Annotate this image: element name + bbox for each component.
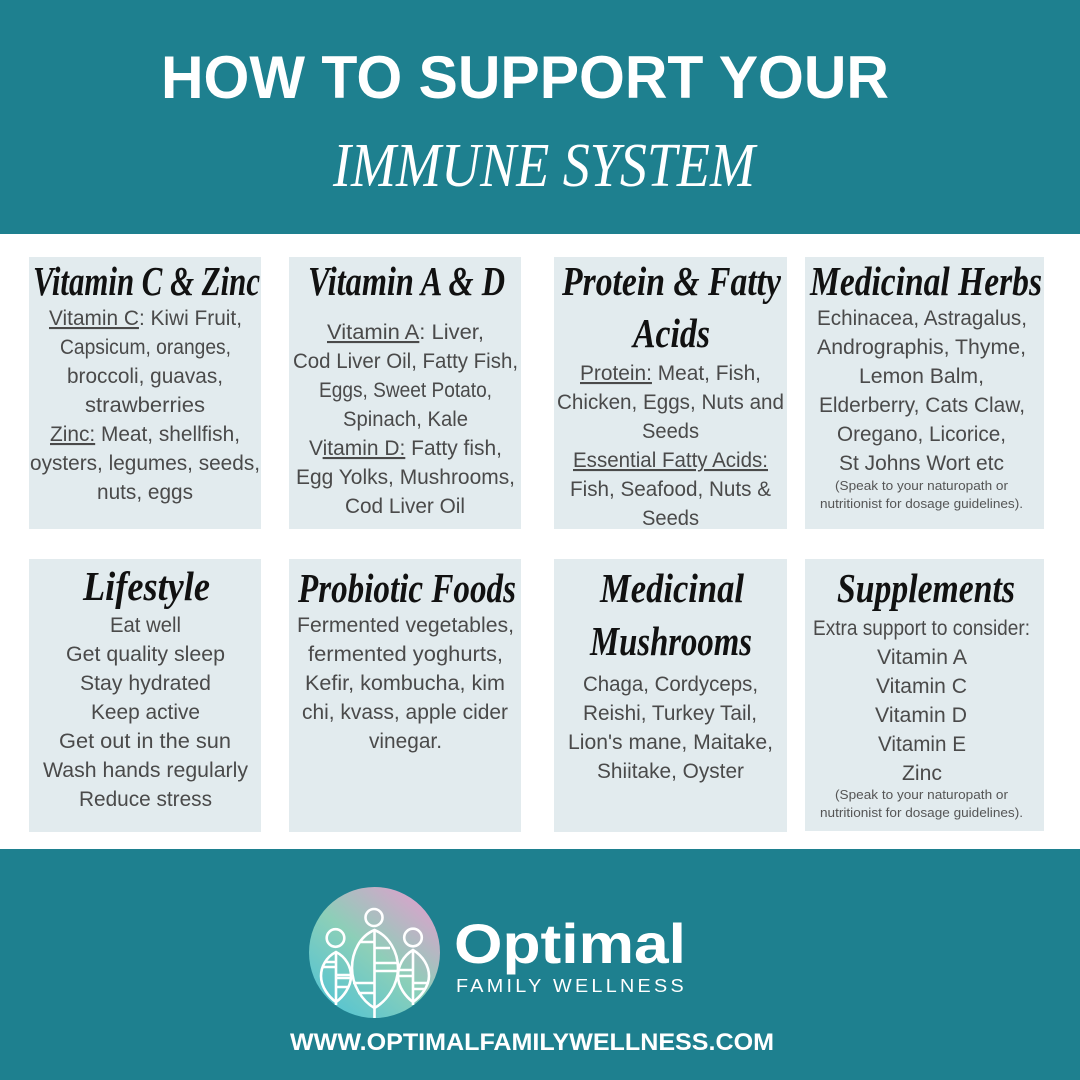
panel: medicinal mushrooms: [554, 559, 787, 832]
note: dosage guidance: (Speak to your naturopath or: [835, 787, 1009, 802]
list: vitamin c and zinc foods: Capsicum, oranges,: [60, 336, 231, 359]
list: probiotic foods: Kefir, kombucha, kim: [305, 672, 505, 695]
list: mushrooms: Shiitake, Oyster: [597, 760, 744, 783]
list: protein and fatty acid foods: Chicken, Eggs, Nuts and: [557, 391, 784, 414]
list: herbs: Echinacea, Astragalus,: [817, 307, 1027, 330]
list: vitamin a and d foods: Spinach, Kale: [343, 408, 468, 431]
list: lifestyle habits: Eat well: [110, 614, 181, 637]
website url: WWW.OPTIMALFAMILYWELLNESS.COM: [290, 1029, 774, 1056]
list: vitamin a and d foods: Cod Liver Oil, Fatty Fish,: [293, 350, 518, 373]
list: vitamin a and d foods: [293, 321, 518, 518]
heading: probiotic foods: Probiotic Foods: [297, 565, 516, 611]
list: herbs: Elderberry, Cats Claw,: [819, 394, 1025, 417]
list: mushrooms: Lion's mane, Maitake,: [568, 731, 773, 754]
list: lifestyle habits: Stay hydrated: [80, 672, 211, 695]
list: mushrooms: Chaga, Cordyceps,: [583, 673, 758, 696]
heading: protein and fatty acids: Protein & Fatty: [561, 258, 782, 304]
logo wordmark: Optimal: [454, 912, 686, 975]
panel: protein and fatty acids: [554, 257, 787, 530]
heading: supplements: Supplements: [837, 565, 1015, 611]
heading: vitamin c and zinc: Vitamin C & Zinc: [33, 258, 260, 304]
list: protein and fatty acid foods: Seeds: [642, 420, 699, 443]
note: dosage guidance: nutritionist for dosage guidelines).: [820, 496, 1023, 511]
subtitle: IMMUNE SYSTEM: [332, 132, 758, 200]
list: lifestyle habits: Reduce stress: [79, 788, 212, 811]
list: protein and fatty acid foods: [557, 362, 784, 530]
list: probiotic foods: [297, 614, 514, 753]
list: vitamin c and zinc foods: nuts, eggs: [97, 481, 193, 504]
list: lifestyle habits: Get out in the sun: [59, 730, 231, 753]
panel: vitamin c and zinc: [29, 257, 261, 529]
list: herbs: Oregano, Licorice,: [837, 423, 1006, 446]
list: lifestyle habits: Get quality sleep: [66, 643, 225, 666]
list: vitamin c and zinc foods: strawberries: [85, 394, 205, 417]
list: vitamin a and d foods: Vitamin D: Fatty fish,: [309, 437, 502, 460]
list: vitamin a and d foods: Egg Yolks, Mushrooms,: [296, 466, 515, 489]
list: herbs: Lemon Balm,: [859, 365, 984, 388]
list: vitamin a and d foods: Vitamin A: Liver,: [327, 321, 484, 344]
icon: logo family of leaves: [309, 887, 440, 1018]
list: vitamin a and d foods: Eggs, Sweet Potato,: [319, 379, 492, 402]
list: mushrooms: [568, 673, 773, 783]
heading: lifestyle: Lifestyle: [82, 563, 210, 609]
list: vitamin c and zinc foods: oysters, legumes, seeds,: [30, 452, 260, 475]
panel: vitamin a and d: [289, 257, 521, 529]
list: vitamin c and zinc foods: broccoli, guavas,: [67, 365, 223, 388]
header band: [0, 0, 1080, 234]
logo wordmark: [454, 912, 687, 996]
heading: medicinal mushrooms: Medicinal: [599, 565, 745, 611]
heading: medicinal mushrooms: Mushrooms: [589, 618, 752, 664]
list: vitamin a and d foods: Cod Liver Oil: [345, 495, 465, 518]
list: probiotic foods: chi, kvass, apple cider: [302, 701, 508, 724]
list: probiotic foods: vinegar.: [369, 730, 442, 753]
list: vitamin c and zinc foods: Zinc: Meat, shellfish,: [50, 423, 240, 446]
list: vitamin c and zinc foods: [30, 307, 260, 504]
list: probiotic foods: fermented yoghurts,: [308, 643, 503, 666]
note: dosage guidance: (Speak to your naturopath or: [835, 478, 1009, 493]
list: herbs: St Johns Wort etc: [839, 452, 1004, 475]
list: supplements: Zinc: [902, 762, 942, 785]
list: vitamin c and zinc foods: Vitamin C: Kiwi Fruit,: [49, 307, 242, 330]
heading: protein and fatty acids: [561, 258, 782, 356]
list: supplements: Vitamin C: [876, 675, 967, 698]
heading: protein and fatty acids: Acids: [631, 310, 710, 356]
list: supplements: Vitamin E: [878, 733, 966, 756]
list: lifestyle habits: [43, 614, 248, 811]
list: supplements: [813, 617, 1030, 785]
list: protein and fatty acid foods: Protein: Meat, Fish,: [580, 362, 761, 385]
list: lifestyle habits: Keep active: [91, 701, 200, 724]
panel: lifestyle: [29, 559, 261, 832]
list: supplements: Vitamin A: [877, 646, 967, 669]
list: protein and fatty acid foods: Essential Fatty Acids:: [573, 449, 768, 472]
list: supplements: Vitamin D: [875, 704, 967, 727]
logo wordmark: FAMILY WELLNESS: [456, 976, 687, 996]
heading: medicinal mushrooms: [589, 565, 752, 664]
title: HOW TO SUPPORT YOUR: [161, 44, 889, 111]
list: herbs: Andrographis, Thyme,: [817, 336, 1026, 359]
note: dosage guidance: [820, 478, 1023, 511]
note: dosage guidance: nutritionist for dosage guidelines).: [820, 805, 1023, 820]
list: mushrooms: Reishi, Turkey Tail,: [583, 702, 757, 725]
panel: probiotic foods: [289, 559, 521, 832]
panel: supplements: [805, 559, 1044, 831]
list: herbs: [817, 307, 1027, 475]
list: probiotic foods: Fermented vegetables,: [297, 614, 514, 637]
panel: medicinal herbs: [805, 257, 1044, 529]
note: dosage guidance: [820, 787, 1023, 820]
heading: vitamin a and d: Vitamin A & D: [308, 258, 505, 304]
footer band: [0, 849, 1080, 1080]
list: lifestyle habits: Wash hands regularly: [43, 759, 248, 782]
list: supplements: Extra support to consider:: [813, 617, 1030, 640]
list: protein and fatty acid foods: Fish, Seafood, Nuts &: [570, 478, 771, 501]
list: protein and fatty acid foods: Seeds: [642, 507, 699, 530]
